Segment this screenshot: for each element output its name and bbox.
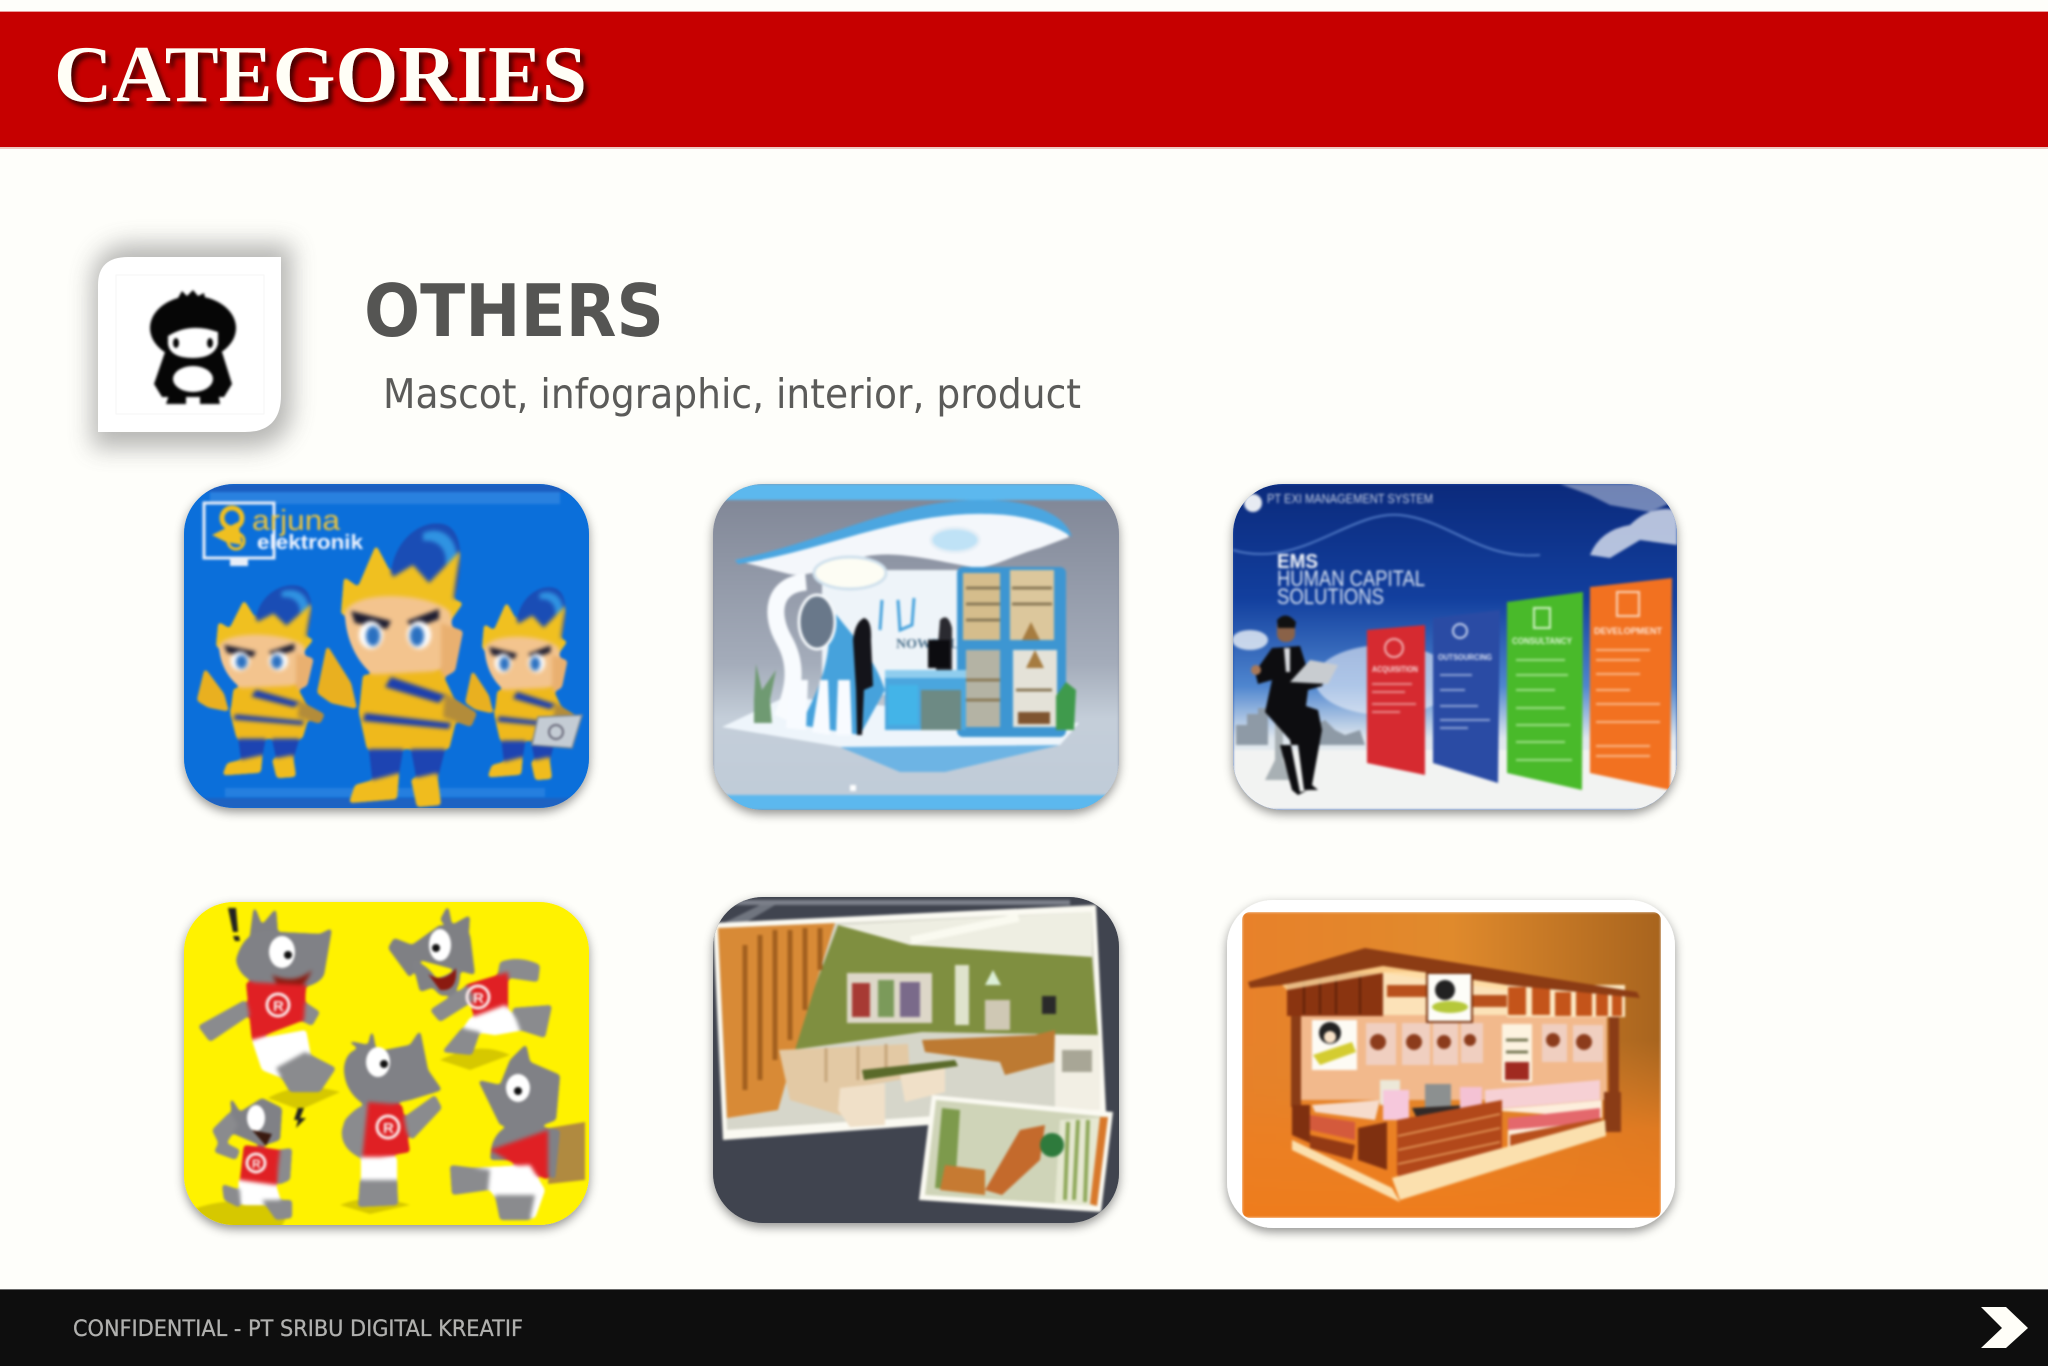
footer text: CONFIDENTIAL - PT SRIBU DIGITAL KREATIF — [73, 1317, 523, 1342]
counter — [885, 670, 966, 730]
roof — [735, 508, 1069, 575]
white columns — [786, 680, 852, 735]
panel: acquisition — [1367, 625, 1425, 775]
panel: consultancy: CONSULTANCY — [1512, 636, 1572, 646]
display counters — [1310, 1080, 1621, 1160]
card: rhino mascots — [180, 902, 589, 1232]
panel: acquisition: ACQUISITION — [1372, 665, 1418, 674]
rhino: top left: R — [273, 998, 284, 1015]
posters — [1366, 1023, 1603, 1065]
rhino: top left — [198, 905, 336, 1092]
kiosk back wall — [1300, 1015, 1607, 1100]
skyline — [1236, 708, 1365, 745]
floor platform — [723, 698, 1079, 748]
card: exhibition booth: NOWELL — [896, 637, 959, 652]
mascot: right — [465, 587, 577, 780]
rhino: top right — [388, 905, 552, 1055]
wood slat wall — [718, 923, 835, 1118]
cashier and register — [1380, 1080, 1482, 1125]
title: CATEGORIES — [54, 31, 587, 119]
footer band — [0, 1289, 2048, 1366]
menu board — [1502, 1024, 1532, 1082]
mascot: centre — [317, 524, 477, 807]
logo panel — [1312, 1020, 1357, 1070]
white arch and clock — [776, 582, 806, 718]
rhino: centre: R — [383, 1120, 394, 1137]
box — [548, 1122, 585, 1184]
rhino: top right: R — [473, 990, 484, 1007]
blue swoosh — [804, 614, 886, 736]
brick counter — [1292, 1100, 1606, 1202]
fascia: centre — [1383, 972, 1507, 1015]
card: Arjuna Elektronik mascots — [184, 484, 589, 808]
subheading: Mascot, infographic, interior, product — [383, 370, 1081, 418]
roof — [1248, 948, 1640, 998]
clouds — [1232, 484, 1677, 715]
logo — [204, 503, 364, 566]
back wall — [822, 570, 960, 695]
heading text: EMS — [1277, 551, 1318, 573]
receptionist — [936, 617, 952, 670]
icon: laptop — [532, 715, 582, 748]
shelves — [957, 567, 1066, 737]
logo text — [880, 598, 914, 630]
header band — [0, 11, 2048, 149]
icon: penguin mascot — [150, 290, 236, 404]
icon tile: mascot — [92, 244, 292, 448]
panel: consultancy — [1507, 592, 1583, 790]
logo: arjuna — [252, 505, 341, 537]
fascia: left — [1287, 973, 1383, 1016]
wave lines — [1233, 515, 1540, 555]
panel: development — [1590, 578, 1672, 790]
kiosk pillars — [1291, 1015, 1301, 1107]
ceiling — [838, 912, 1092, 957]
mascot: left — [197, 585, 325, 778]
fascia: right — [1507, 985, 1625, 1017]
reception desk — [922, 1030, 1055, 1075]
card: product kiosk — [1227, 900, 1675, 1228]
heading text: SOLUTIONS — [1277, 584, 1384, 609]
rhino: bottom left: R — [252, 1157, 261, 1171]
display cabinet — [1055, 1035, 1100, 1110]
icon: next arrow — [1981, 1307, 2028, 1348]
main photo — [713, 905, 1106, 1140]
heading: OTHERS: OTHERS — [364, 269, 664, 353]
woman visitor — [853, 618, 873, 735]
sofas — [779, 1044, 910, 1118]
shop sign — [1427, 973, 1472, 1022]
poster — [847, 973, 932, 1023]
olive wall — [791, 925, 1098, 1050]
heading text: PT EXI MANAGEMENT SYSTEM — [1267, 491, 1433, 506]
inset photo — [919, 1095, 1113, 1212]
heading text: HUMAN CAPITAL — [1277, 566, 1425, 591]
businessman on stool — [1251, 615, 1338, 795]
panel: development: DEVELOPMENT — [1594, 626, 1662, 636]
heading text — [1267, 491, 1433, 609]
panel: outsourcing — [1433, 610, 1500, 783]
plants — [754, 664, 776, 723]
logo: elektronik — [257, 532, 364, 554]
card: exhibition booth — [713, 484, 1119, 810]
rhino: bottom right — [450, 1044, 560, 1220]
exclamation mark — [228, 908, 240, 941]
panel: outsourcing: OUTSOURCING — [1438, 653, 1492, 662]
card: EMS human capital — [1232, 484, 1677, 810]
card: cafe interior — [713, 897, 1119, 1223]
rhino: bottom left — [212, 1096, 306, 1220]
rhino: centre — [342, 1028, 442, 1207]
